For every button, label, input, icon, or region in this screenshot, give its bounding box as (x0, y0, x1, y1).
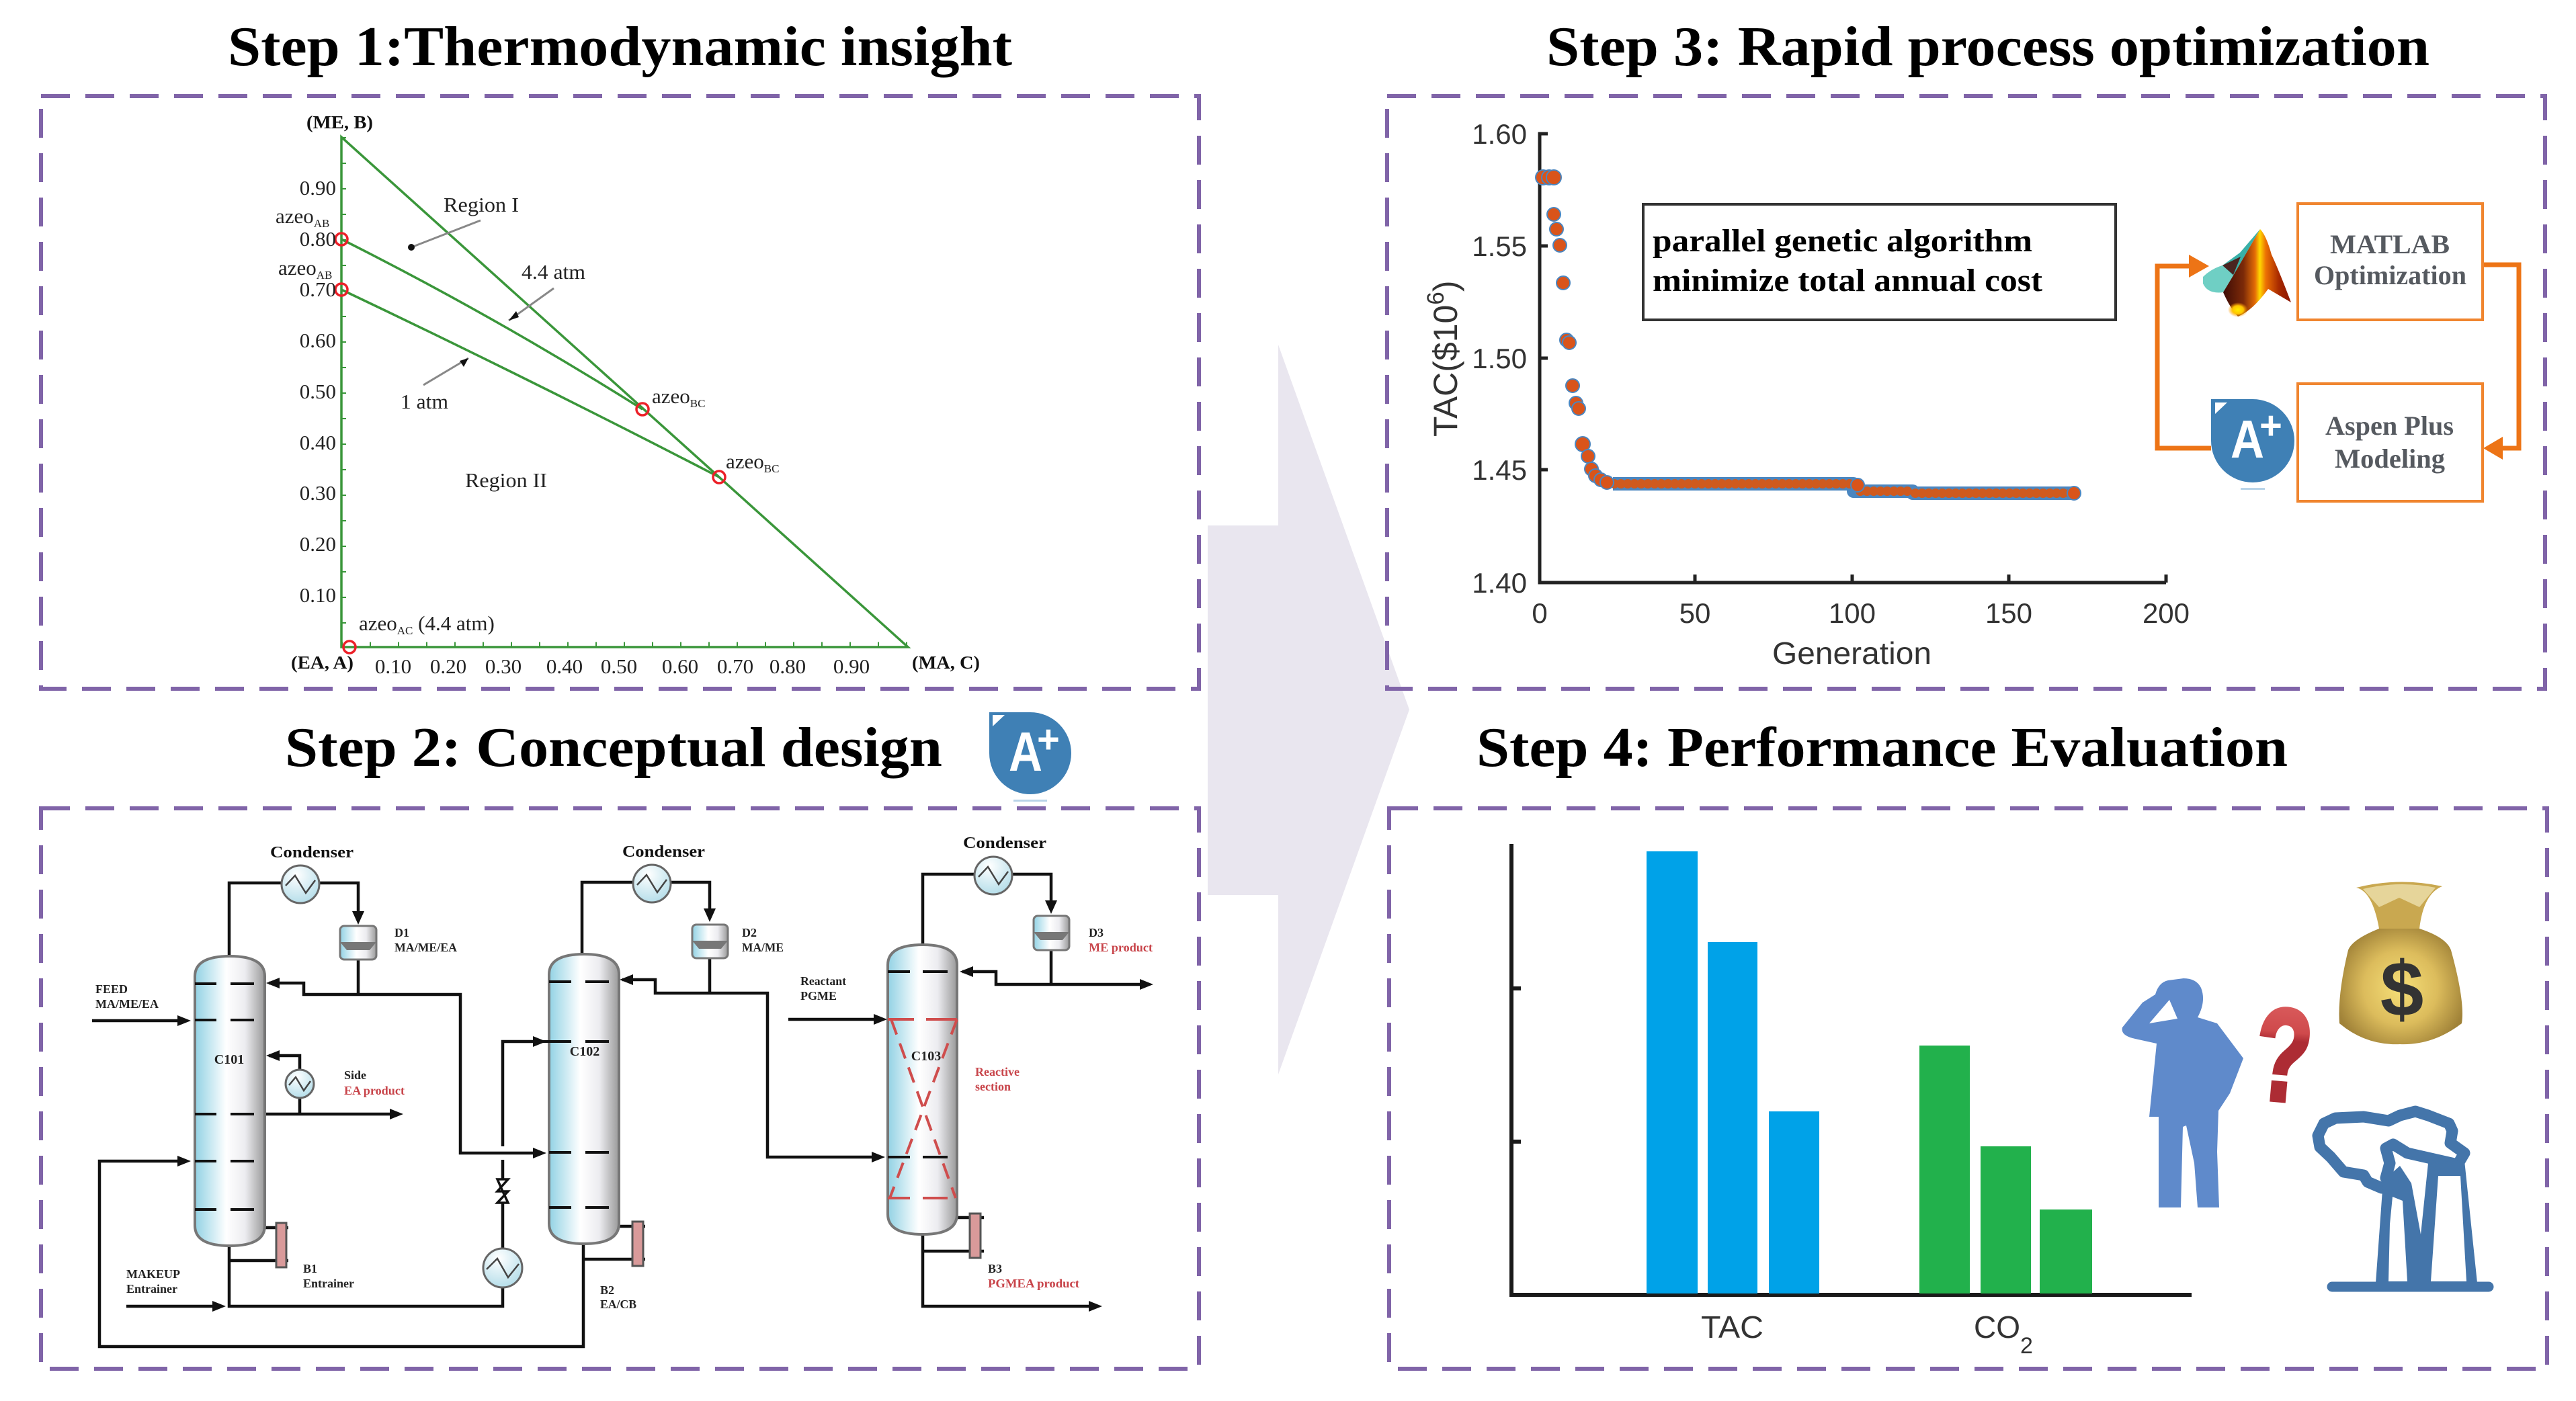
icon: factory with smoke (2318, 1111, 2489, 1287)
axis and region labels: azeo (726, 450, 764, 473)
box: Aspen Plus Modeling: Modeling (2335, 443, 2445, 474)
CO2 bars (1919, 1046, 2092, 1293)
optimization loop connectors (2157, 255, 2519, 460)
flowsheet stream labels: PGMEA product (988, 1277, 1079, 1290)
ternary triangle and distillation boundaries (341, 137, 908, 647)
bottom axis labels: 0.70 (717, 654, 753, 678)
ternary tick labels: 0.50 (300, 380, 336, 403)
large background arrow (1208, 345, 1409, 1074)
box: MATLAB Optimization (2298, 204, 2483, 320)
column C101: C101 (214, 1052, 244, 1067)
flowsheet stream labels: FEED (95, 982, 128, 996)
annotation arrows (408, 220, 554, 385)
bottom axis labels (375, 654, 870, 678)
flowsheet stream labels: EA/CB (600, 1298, 636, 1311)
bottom axis labels: 0.40 (546, 654, 583, 678)
flowsheet stream labels: Condenser (963, 835, 1046, 852)
bottom axis labels: 0.20 (430, 654, 466, 678)
title: step 3: Step 3: Rapid process optimization (1546, 15, 2429, 78)
axis and region labels: AC (397, 624, 413, 637)
x tick labels (1532, 597, 2190, 629)
column C102: C102 (570, 1044, 599, 1059)
algorithm callout box (1643, 204, 2116, 320)
valve (497, 1179, 508, 1203)
axis and region labels: Region I (444, 193, 519, 216)
axis and region labels (276, 112, 980, 673)
ternary tick labels: 0.70 (300, 278, 336, 301)
flowsheet stream labels: B1 (303, 1262, 317, 1275)
flowsheet stream labels: B2 (600, 1283, 614, 1297)
flow arrowheads (177, 900, 1153, 1312)
axis and region labels: azeo (276, 204, 314, 228)
panel: step 1 thermodynamic ternary diagram (41, 96, 1199, 689)
ternary tick labels: 0.80 (300, 227, 336, 251)
column C102 (538, 954, 619, 1244)
icon: Aspen Plus logo in loop: A (2231, 409, 2264, 469)
flowsheet stream labels: Condenser (270, 844, 354, 861)
icon: question mark: ? (2249, 980, 2318, 1131)
algorithm callout box: parallel genetic algorithm (1653, 223, 2032, 259)
axis and region labels: (EA, A) (291, 652, 354, 673)
x tick labels: 200 (2143, 597, 2190, 629)
pipes (92, 874, 1142, 1347)
axis and region labels: (MA, C) (912, 652, 980, 673)
flowsheet stream labels: D3 (1089, 926, 1104, 939)
column C103 with reactive section: C103 (911, 1049, 941, 1064)
y tick labels (1472, 118, 1527, 599)
title: step 1: Step 1:Thermodynamic insight (228, 15, 1012, 78)
reboilers (276, 1214, 981, 1267)
flowsheet stream labels: EA product (344, 1084, 405, 1097)
ternary tick labels: 0.10 (300, 583, 336, 607)
icon: Aspen Plus logo beside step 2: A (1009, 720, 1042, 783)
x tick labels: 0 (1532, 597, 1548, 629)
flowsheet stream labels: Side (344, 1068, 366, 1082)
icon: Aspen Plus logo in loop: + (2259, 404, 2282, 448)
flowsheet stream labels: section (975, 1080, 1011, 1093)
axis and region labels: azeo (652, 384, 690, 408)
bottom axis labels: 0.50 (601, 654, 637, 678)
flowsheet stream labels: ME product (1089, 941, 1153, 954)
box: MATLAB Optimization: Optimization (2314, 260, 2466, 290)
panel: step 3 rapid optimization (1387, 96, 2545, 689)
panel: step 2 process flowsheet (41, 808, 1199, 1369)
flowsheet stream labels: D1 (394, 926, 409, 939)
y axis title: 6 (1423, 292, 1449, 305)
title: step 4: Step 4: Performance Evaluation (1477, 716, 2288, 779)
title: step 2: Step 2: Conceptual design (285, 716, 942, 779)
flowsheet stream labels: MA/ME/EA (394, 941, 457, 954)
CO2 category label: CO (1974, 1310, 2020, 1345)
bottom axis labels: 0.80 (770, 654, 806, 678)
flowsheet stream labels: Entrainer (303, 1277, 354, 1290)
axis and region labels: 4.4 atm (522, 260, 585, 284)
icon: MATLAB membrane logo (2203, 229, 2291, 317)
column C103 with reactive section (888, 945, 957, 1234)
box: Aspen Plus Modeling (2298, 384, 2483, 501)
flowsheet stream labels: MA/ME (742, 941, 784, 954)
flowsheet stream labels: D2 (742, 926, 757, 939)
y tick labels: 1.55 (1472, 230, 1527, 262)
axis and region labels: (4.4 atm) (413, 611, 495, 635)
flowsheet stream labels: MAKEUP (126, 1267, 180, 1281)
x tick labels: 50 (1679, 597, 1710, 629)
axis and region labels: BC (690, 397, 705, 410)
azeotrope markers (335, 233, 725, 653)
axis and region labels: AB (317, 269, 332, 282)
y tick labels: 1.45 (1472, 454, 1527, 486)
flowsheet stream labels: Reactant (800, 974, 846, 988)
x axis title: Generation (1772, 636, 1931, 671)
bar chart (1511, 844, 2192, 1359)
bottom axis labels: 0.10 (375, 654, 411, 678)
algorithm callout box: minimize total annual cost (1653, 263, 2042, 298)
axis and region labels: (ME, B) (306, 112, 373, 132)
flowsheet stream labels: PGME (800, 989, 837, 1003)
box: Aspen Plus Modeling: Aspen Plus (2325, 411, 2454, 441)
icon: Aspen Plus logo beside step 2: + (1037, 718, 1060, 761)
reflux drums (340, 916, 1069, 960)
ternary tick labels: 0.30 (300, 481, 336, 505)
bottom axis labels: 0.60 (662, 654, 698, 678)
axis and region labels: BC (764, 462, 779, 475)
icon: thinking person (2122, 978, 2243, 1207)
panel: step 4 performance evaluation (1389, 808, 2547, 1369)
column C101 (195, 956, 265, 1246)
TAC bars (1647, 851, 1819, 1293)
y tick labels: 1.60 (1472, 118, 1527, 150)
flowsheet stream labels (95, 835, 1153, 1311)
ternary tick labels: 0.60 (300, 329, 336, 352)
bottom axis labels: 0.30 (485, 654, 522, 678)
y tick labels: 1.50 (1472, 343, 1527, 374)
ternary tick labels: 0.90 (300, 176, 336, 200)
y axis title: ) (1427, 281, 1464, 292)
CO2 category label: 2 (2020, 1333, 2033, 1359)
axis and region labels: azeo (359, 611, 397, 635)
icon: money bag (2339, 882, 2462, 1044)
flowsheet stream labels: Reactive (975, 1065, 1020, 1078)
flowsheet stream labels: MA/ME/EA (95, 997, 159, 1011)
axis and region labels: AB (314, 217, 329, 230)
ternary tick labels (300, 176, 336, 607)
flowsheet stream labels: Entrainer (126, 1282, 177, 1296)
category labels: TAC (1701, 1310, 1763, 1345)
icon: Aspen Plus logo in loop (2211, 399, 2294, 490)
x tick labels: 150 (1985, 597, 2032, 629)
data series (1536, 170, 2081, 500)
box: MATLAB Optimization: MATLAB (2330, 229, 2450, 259)
y tick labels: 1.40 (1472, 567, 1527, 599)
icon: money bag: $ (2380, 945, 2423, 1033)
flowsheet stream labels: Condenser (622, 843, 705, 861)
axis and region labels: Region II (465, 468, 547, 492)
axis and region labels: azeo (278, 256, 317, 280)
icon: Aspen Plus logo beside step 2 (989, 712, 1071, 802)
y axis title: TAC($10 (1427, 305, 1464, 437)
ternary tick labels: 0.20 (300, 532, 336, 556)
condensers and heat exchangers (282, 857, 1012, 1287)
axis and region labels: 1 atm (401, 390, 448, 413)
convergence chart (1423, 118, 2190, 671)
bottom axis labels: 0.90 (833, 654, 870, 678)
flowsheet stream labels: B3 (988, 1262, 1002, 1275)
x tick labels: 100 (1829, 597, 1876, 629)
ternary tick labels: 0.40 (300, 431, 336, 454)
